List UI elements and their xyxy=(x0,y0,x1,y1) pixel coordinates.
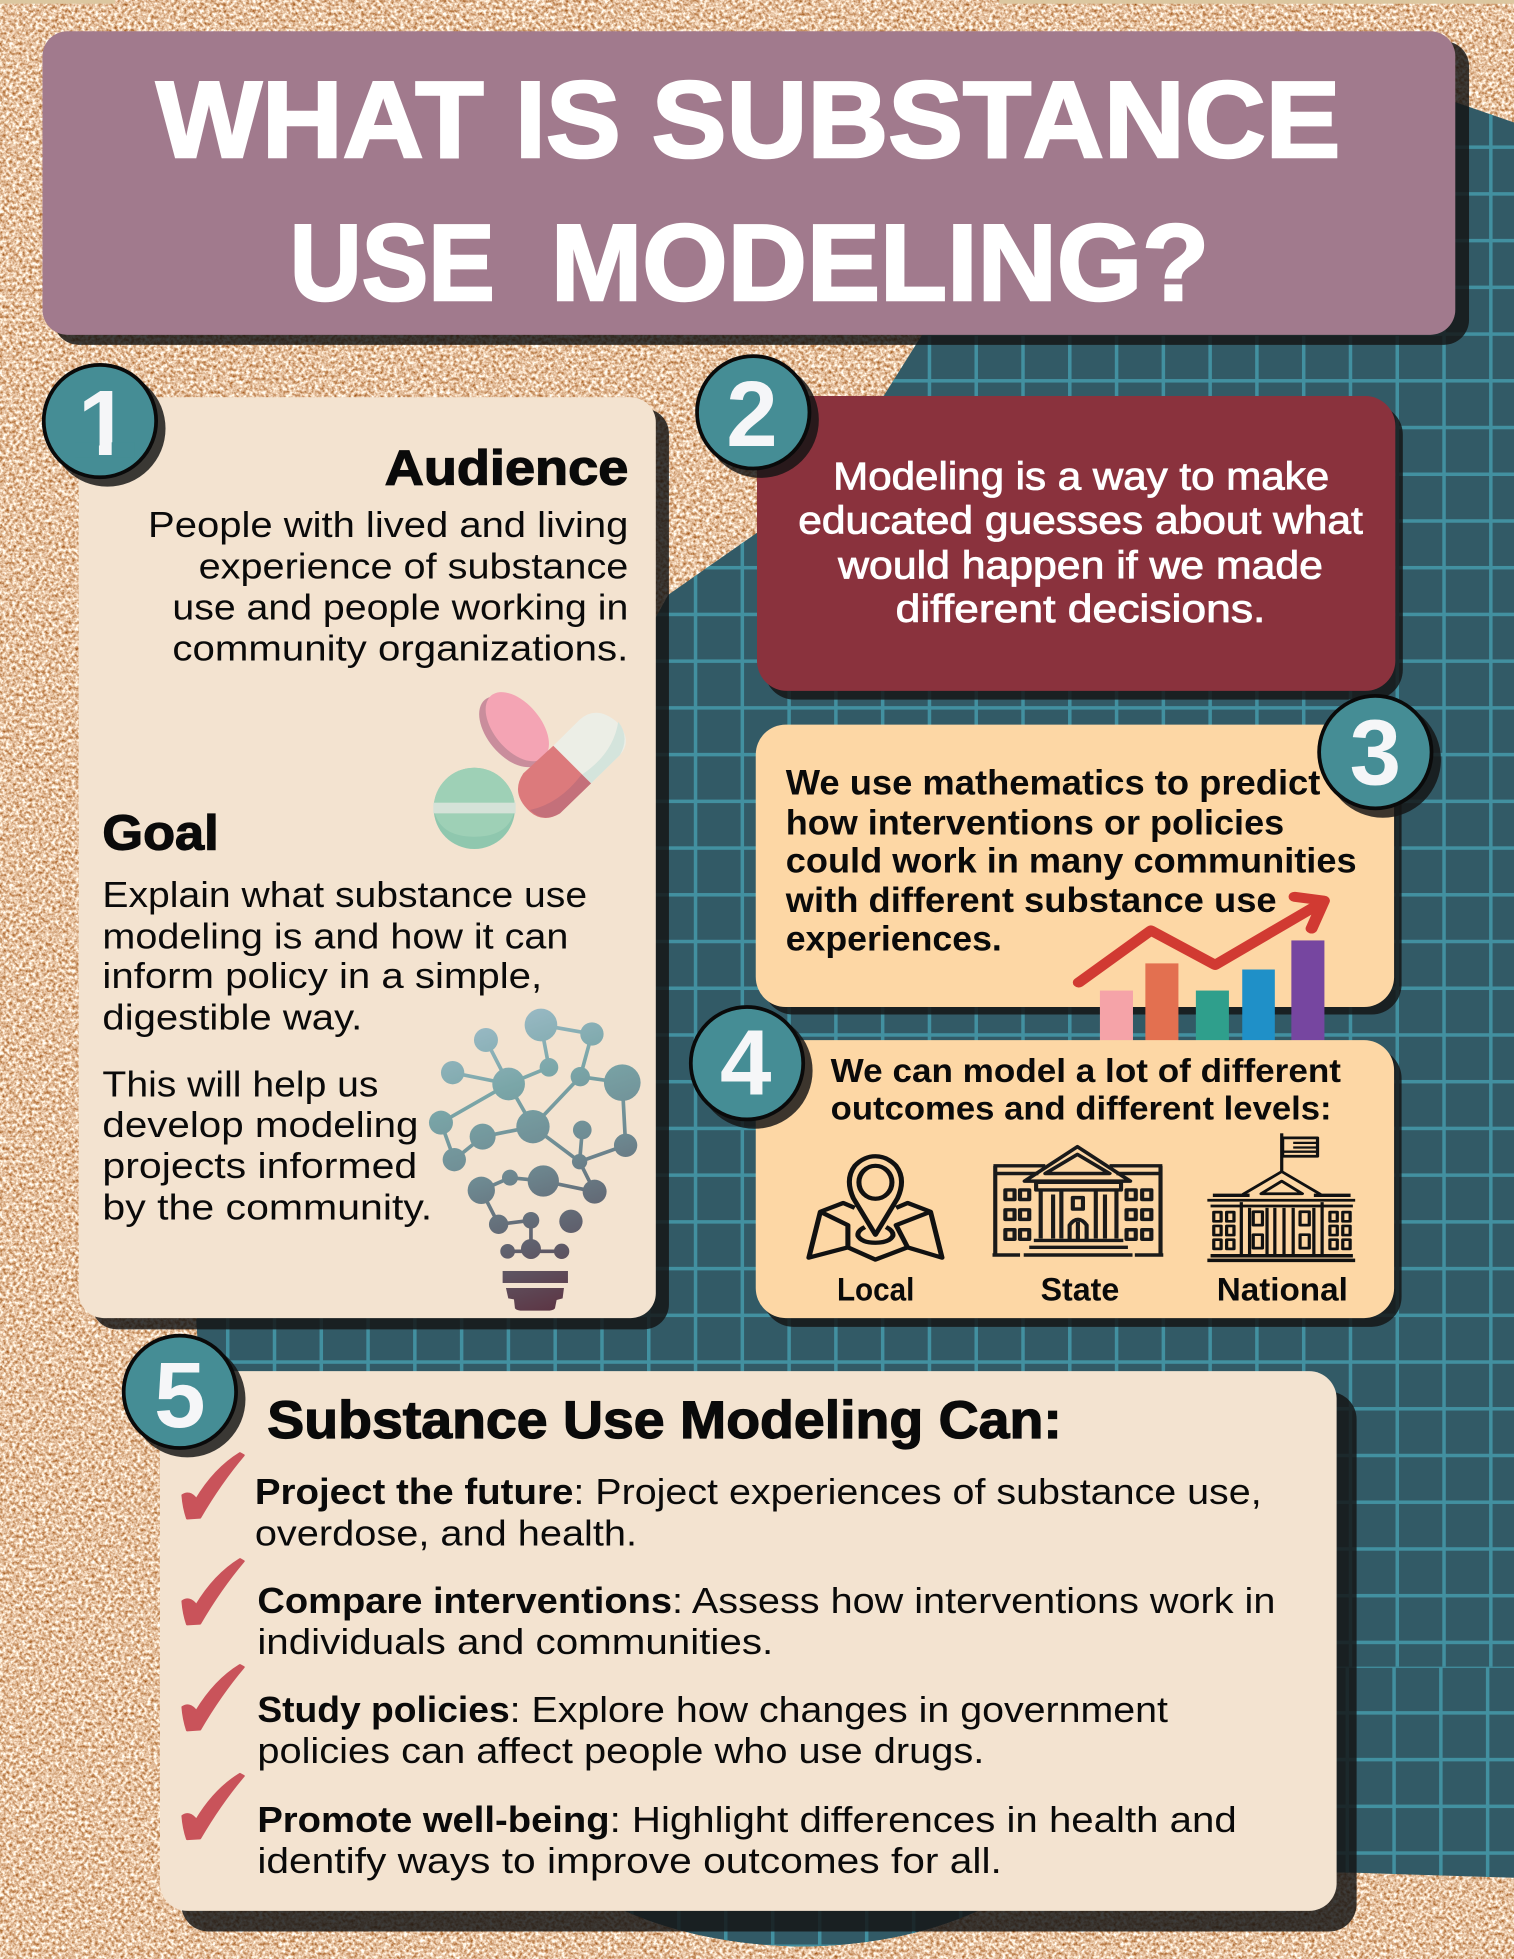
badge 5: 5 xyxy=(154,1343,206,1447)
list item: promote well-being: identify ways to improve outcomes for all. xyxy=(257,1840,1002,1881)
badge 5 xyxy=(124,1336,245,1457)
panel 4: outcomes and levels xyxy=(756,1040,1402,1327)
heading: goal: Goal xyxy=(102,807,219,861)
panel 2: modeling definition: would happen if we made xyxy=(837,544,1323,587)
badge 1: 1 xyxy=(78,371,129,475)
icon: local map pin xyxy=(809,1156,942,1260)
panel 3: mathematics prediction xyxy=(756,725,1402,1014)
panel 3: mathematics prediction: could work in many communities xyxy=(786,842,1357,881)
icon: check mark 3 xyxy=(183,1665,244,1730)
badge 1 xyxy=(44,365,166,487)
panel 3: mathematics prediction: how interventions or policies xyxy=(786,804,1284,843)
list item: project the future: overdose, and health. xyxy=(255,1512,637,1553)
text: audience description: People with lived and living xyxy=(148,504,628,545)
list item: study policies: : Explore how changes in government xyxy=(510,1689,1168,1730)
panel 2: modeling definition xyxy=(757,396,1403,700)
icon: check mark 2 xyxy=(183,1559,244,1624)
text: goal description: projects informed xyxy=(102,1145,417,1186)
panel 4: outcomes and levels: We can model a lot of different xyxy=(831,1052,1341,1090)
panel 1: audience and goal xyxy=(79,397,669,1329)
text: goal description: digestible way. xyxy=(102,996,362,1037)
panel 2: modeling definition: different decisions. xyxy=(896,588,1265,631)
text: goal description: modeling is and how it can xyxy=(102,915,568,956)
text: audience description: experience of substance xyxy=(199,545,628,586)
badge 4 xyxy=(691,1007,813,1129)
list item: project the future: : Project experiences of substance use, xyxy=(573,1471,1262,1512)
list item: project the future: Project the future xyxy=(255,1471,573,1512)
badge 3: 3 xyxy=(1350,701,1401,805)
badge 2 xyxy=(697,356,819,478)
panel 5: what modeling can do xyxy=(160,1371,1357,1932)
badge 4: 4 xyxy=(720,1010,771,1114)
text: goal description xyxy=(102,874,587,1227)
text: goal description: This will help us xyxy=(102,1063,379,1104)
title banner: MODELING? xyxy=(551,203,1209,324)
text: audience description: use and people working in xyxy=(172,587,628,628)
text: goal description: Explain what substance use xyxy=(102,874,587,915)
label: state: State xyxy=(1041,1272,1119,1308)
list item: project the future xyxy=(255,1471,1262,1553)
label: local: Local xyxy=(837,1272,914,1308)
text: goal description: by the community. xyxy=(102,1186,432,1227)
icon: check mark 4 xyxy=(183,1774,244,1839)
panel 2: modeling definition: Modeling is a way to make xyxy=(833,456,1329,499)
list item: promote well-being: Promote well-being xyxy=(257,1799,610,1840)
list item: compare interventions: individuals and communities. xyxy=(257,1621,773,1662)
list item: compare interventions: : Assess how interventions work in xyxy=(672,1580,1275,1621)
panel 3: mathematics prediction: experiences. xyxy=(786,919,1002,958)
icon: state building xyxy=(993,1147,1163,1255)
list item: compare interventions: Compare interventions xyxy=(257,1580,672,1621)
list item: study policies: Study policies xyxy=(257,1689,510,1730)
list item: study policies: policies can affect people who use drugs. xyxy=(257,1730,984,1771)
label: national: National xyxy=(1217,1272,1348,1308)
heading: substance use modeling can: Substance Use Modeling Can: xyxy=(267,1392,1062,1450)
icon: national capitol with flag xyxy=(1207,1133,1355,1260)
text: audience description: community organizations. xyxy=(172,627,628,668)
list item: study policies xyxy=(257,1689,1168,1771)
heading: audience: Audience xyxy=(385,442,628,496)
panel 3: mathematics prediction: We use mathematics to predict xyxy=(786,764,1321,803)
icon: pills xyxy=(433,681,626,849)
badge 2: 2 xyxy=(726,362,778,466)
text: goal description: develop modeling xyxy=(102,1104,418,1145)
title banner: USE xyxy=(290,203,495,324)
list item: promote well-being: : Highlight differences in health and xyxy=(610,1799,1237,1840)
title banner: WHAT IS SUBSTANCE xyxy=(156,60,1340,181)
panel 4: outcomes and levels: outcomes and different levels: xyxy=(831,1089,1332,1127)
icon: network lightbulb xyxy=(429,1009,641,1311)
chart: rising bars with arrow xyxy=(1079,897,1324,1044)
panel 3: mathematics prediction: with different substance use xyxy=(785,881,1277,920)
text: goal description: inform policy in a simple, xyxy=(102,955,542,996)
badge 3 xyxy=(1319,696,1441,818)
list item: compare interventions xyxy=(257,1580,1275,1662)
icon: check mark 1 xyxy=(183,1453,244,1518)
title banner xyxy=(42,31,1469,345)
list item: promote well-being xyxy=(257,1799,1237,1881)
text: audience description xyxy=(148,504,628,668)
panel 2: modeling definition: educated guesses about what xyxy=(798,499,1363,542)
